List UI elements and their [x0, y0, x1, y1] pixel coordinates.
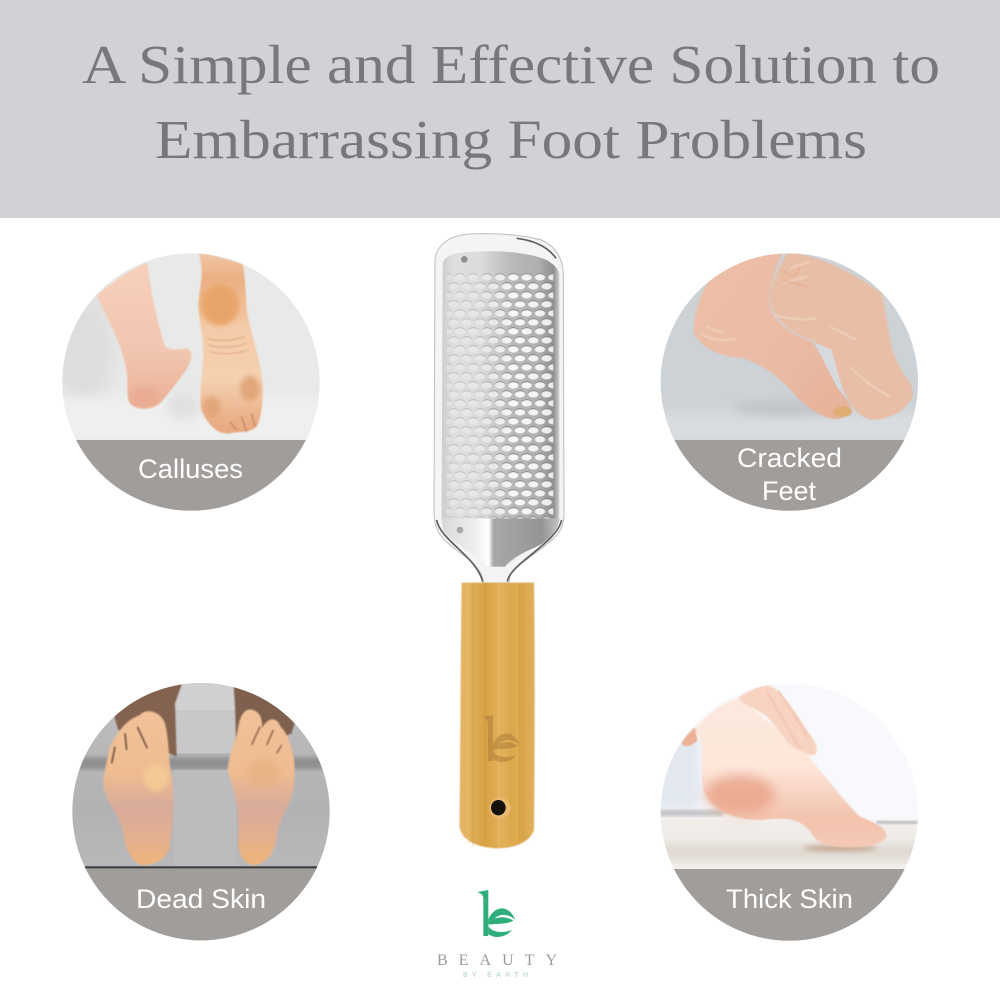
panel: thick skin: [660, 685, 918, 941]
label: dead skin: Dead Skin: [136, 884, 266, 914]
left sole: [103, 711, 174, 865]
label band: [674, 440, 904, 511]
label: cracked feet: Feet: [762, 476, 816, 506]
wordmark: BY EARTH: [463, 972, 528, 979]
label band: [674, 869, 905, 941]
rim highlights: [517, 238, 556, 258]
title: Embarrassing Foot Problems: [155, 109, 867, 170]
label: thick skin: Thick Skin: [726, 884, 853, 914]
wooden handle: [459, 583, 535, 848]
wire arms: [437, 520, 562, 582]
metal grater head: [434, 234, 564, 583]
label: calluses: Calluses: [138, 454, 243, 484]
back foot: [770, 253, 913, 420]
engraved mark: [482, 715, 520, 762]
plate: [442, 251, 559, 567]
panel: cracked feet: [660, 253, 918, 511]
neck reflection: [441, 518, 560, 567]
brand logo: [437, 890, 557, 979]
foot file product: [434, 234, 564, 848]
fingers: [682, 685, 817, 755]
title: A Simple and Effective Solution to: [82, 34, 940, 95]
label: cracked feet: Cracked: [737, 443, 842, 473]
label: cracked feet: [737, 443, 842, 506]
icon: leaf b e mark: [477, 890, 515, 937]
left foot: [97, 263, 191, 409]
label band: [60, 866, 340, 869]
panel: calluses: [62, 254, 320, 511]
title banner: [0, 0, 1000, 218]
legs: [114, 684, 183, 757]
gap between feet: [815, 343, 844, 395]
wordmark: [437, 952, 557, 979]
holes: [447, 273, 553, 518]
right foot: [198, 252, 263, 433]
label band: [76, 440, 306, 511]
panel: dead skin: [72, 683, 330, 940]
wordmark: BEAUTY: [437, 952, 557, 969]
rivets: [461, 256, 468, 263]
hanging hole: [489, 797, 511, 819]
front foot: [693, 250, 852, 419]
right sole: [228, 709, 295, 865]
grater rim and neck: [434, 234, 564, 583]
foot: [695, 698, 887, 847]
title: [82, 34, 940, 170]
